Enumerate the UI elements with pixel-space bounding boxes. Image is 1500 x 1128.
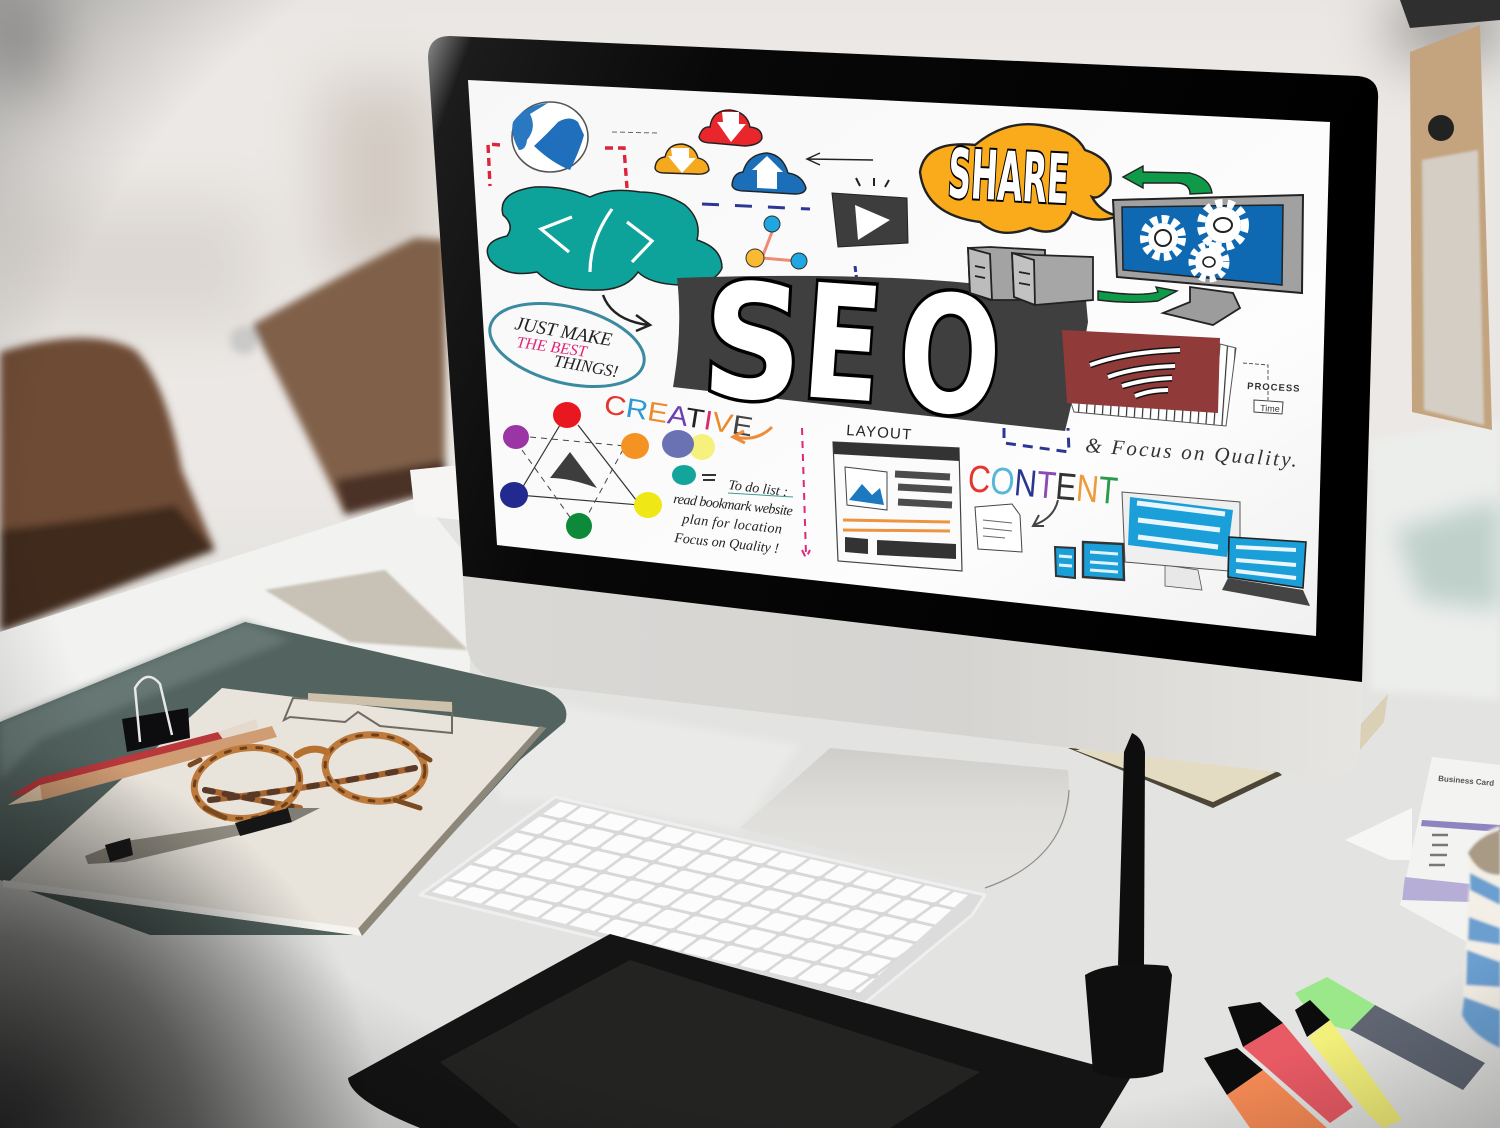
monitor stand [740, 748, 1070, 888]
desk surface [0, 420, 1500, 1128]
short dashes [612, 132, 658, 133]
servers [968, 247, 1093, 305]
highlighter: orange [1204, 1048, 1327, 1128]
drawing tablet [348, 934, 1132, 1128]
desk pen and holder [1085, 733, 1172, 1078]
speech bubble: just make the best things: JUST MAKE [513, 313, 614, 351]
device: desktop [1122, 492, 1240, 590]
LAYOUT label: LAYOUT [846, 422, 912, 444]
to do list: read bookmark website [673, 492, 793, 520]
globe icon [512, 102, 588, 172]
document sheets right [1345, 757, 1500, 960]
folder on the right [1400, 0, 1500, 430]
chair: left [0, 338, 215, 632]
pencils [8, 719, 277, 805]
to do list: plan for location [681, 512, 783, 537]
red dashed brackets [488, 144, 627, 188]
monitor icon with gears [1113, 195, 1303, 325]
play icon [832, 178, 908, 247]
red wifi card [1062, 330, 1236, 426]
colour network diagram [500, 402, 716, 539]
speech bubble: just make the best things [481, 289, 653, 401]
notebook [1068, 694, 1388, 808]
highlighter: red [1228, 1002, 1353, 1123]
monitor screen [468, 80, 1330, 636]
green arrows [1098, 166, 1212, 302]
SHARE bubble: SHARE [946, 134, 1071, 220]
monitor chin [462, 560, 1364, 778]
teal code cloud [487, 187, 722, 290]
curved arrow [603, 295, 650, 331]
paper stack [3, 688, 546, 936]
folder [0, 622, 566, 935]
responsive devices [1055, 492, 1310, 606]
navy dashed bracket [1004, 428, 1069, 452]
speech bubble: just make the best things: THINGS! [552, 351, 620, 381]
gears [1144, 203, 1245, 279]
layout wireframe [833, 442, 962, 571]
content arrow [1033, 500, 1058, 526]
pink dashed arrow [802, 428, 810, 558]
highlighter: yellow [1295, 1000, 1402, 1128]
orange arrow [733, 427, 772, 443]
thin arrow [807, 153, 873, 165]
binder clip [122, 677, 190, 752]
device: tablet [1083, 542, 1124, 580]
keyboard [420, 797, 985, 1003]
navy dashes [702, 204, 810, 209]
device: phone [1055, 547, 1075, 578]
document icon [975, 504, 1022, 552]
CONTENT heading: CONTENT [966, 458, 1119, 513]
monitor [428, 36, 1378, 778]
SEO banner [673, 250, 1088, 452]
document sheets right: Business Card [1438, 774, 1495, 788]
SEO lettering: S [698, 250, 808, 438]
process label: Time [1260, 403, 1280, 414]
chair: back [230, 238, 445, 515]
eyeglasses [190, 731, 430, 825]
SHARE bubble [920, 124, 1118, 233]
network nodes [746, 216, 857, 282]
speech bubble: just make the best things: THE BEST [515, 334, 589, 361]
to do list [673, 478, 793, 557]
CREATIVE heading: CREATIVE [602, 389, 755, 442]
SEO lettering: O [896, 260, 1004, 452]
to do list: Focus on Quality ! [673, 531, 780, 557]
focus on quality note: & Focus on Quality. [1085, 433, 1298, 472]
SEO lettering [698, 250, 1004, 452]
device: laptop [1222, 537, 1310, 606]
highlighters [1204, 977, 1485, 1128]
process label: PROCESS [1247, 381, 1301, 395]
highlighter: grey green [1295, 977, 1485, 1090]
glasses holder clip [284, 693, 452, 733]
to do list: To do list : [728, 478, 789, 500]
cloud icons [655, 110, 806, 194]
envelope on desk [265, 570, 468, 650]
mechanical pen [85, 808, 320, 864]
monitor bezel [428, 36, 1378, 682]
mug [1462, 826, 1500, 1048]
SEO lettering: E [797, 251, 888, 439]
process label [1243, 363, 1301, 414]
